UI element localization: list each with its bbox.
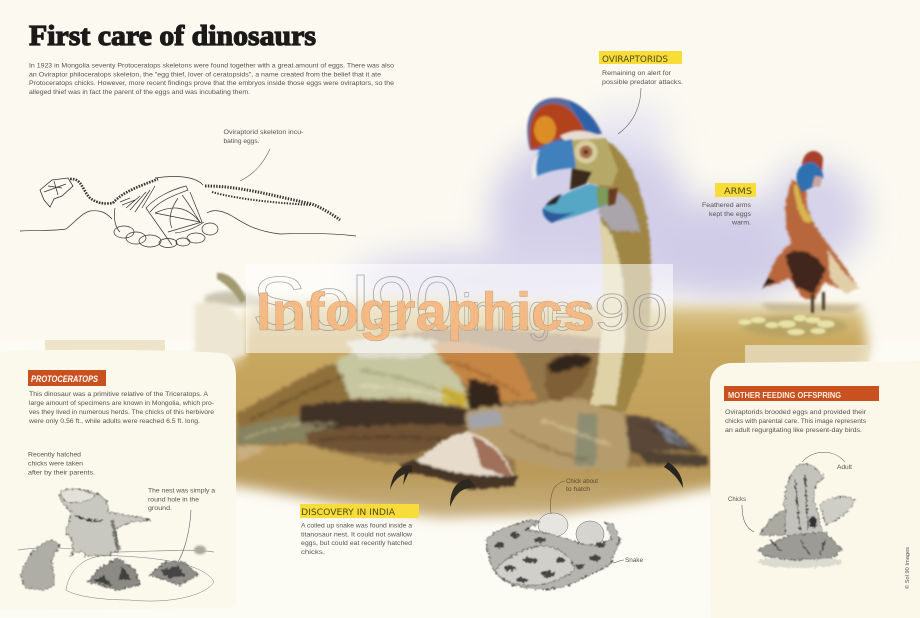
skeleton label with leader: [224, 129, 304, 181]
intro text: an Oviraptor philoceratops skeleton, the "egg thief, lover of ceratopsids", a name created from the belief that it ate: [29, 71, 381, 78]
callout: discovery in india: titanosaur nest. It could not swallow: [301, 532, 412, 538]
label: nest: ground.: [148, 505, 172, 512]
callout: arms: Feathered arms: [702, 202, 752, 209]
sandy ground: [190, 292, 868, 518]
watermark: Sol90: [252, 262, 460, 347]
intro text: In 1923 in Mongolia seventy Protoceratops skeletons were found together with a great amount of eggs. There was also: [29, 62, 394, 70]
label: chick about to hatch: [551, 478, 598, 514]
main oviraptorid illustration: [195, 98, 708, 507]
distant adult oviraptorid: [762, 151, 860, 313]
callout: discovery in india: DISCOVERY IN INDIA: [301, 508, 396, 518]
panel: mother feeding offspring: [710, 361, 920, 618]
watermark: Infographics: [256, 282, 594, 342]
label: snake: [613, 557, 643, 564]
protoceratops heading: PROTOCERATOPS: [31, 374, 98, 384]
callout: discovery in india: eggs, but could eat recently hatched: [301, 540, 412, 547]
mother feeding heading: MOTHER FEEDING OFFSPRING: [728, 390, 841, 400]
protoceratops description: [28, 391, 214, 425]
protoceratops description: ves they lived in numerous herds. The chicks of this herbivore: [29, 409, 214, 416]
tail end behind the panel: [195, 302, 246, 356]
callout: oviraptorids: OVIRAPTORIDS: [602, 55, 668, 65]
front foot with claws: [390, 432, 683, 507]
callout: discovery in india: A coiled up snake was found inside a: [301, 522, 412, 530]
label: recently hatched chicks: chicks were taken: [28, 460, 83, 468]
mother feeding heading: [724, 386, 879, 401]
sketch: adult feeding chicks: [757, 464, 855, 568]
mother feeding description: chicks with parental care. This image represents: [725, 418, 867, 425]
head: [527, 98, 618, 223]
callout: arms: kept the eggs: [709, 211, 752, 218]
fur shading: [245, 360, 695, 460]
label: adult: [802, 452, 852, 471]
title: First care of dinosaurs: [29, 20, 316, 52]
callout: discovery in india: chicks.: [301, 549, 325, 556]
callout: discovery in india: [300, 504, 419, 556]
egg nest: [738, 314, 847, 337]
skeleton label with leader: Oviraptorid skeleton incu-: [224, 129, 304, 136]
protoceratops description: were only 0.56 ft., while adults were reached 6.5 ft. long.: [28, 418, 200, 425]
callout: oviraptorids: [599, 51, 683, 134]
watermark: [246, 262, 673, 353]
copyright credit: © Sol 90 Images: [904, 546, 911, 589]
callout: arms: [702, 183, 756, 226]
label: recently hatched chicks: [28, 452, 95, 476]
label: chicks: [728, 496, 754, 532]
body: [237, 328, 708, 478]
label: chick about to hatch: Chick about: [566, 478, 598, 485]
label: nest: [148, 488, 215, 512]
intro text: alleged thief was in fact the parent of the eggs and was incubating them.: [29, 89, 250, 96]
intro text: [29, 62, 394, 96]
label: nest: round hole in the: [148, 496, 199, 504]
mother feeding description: Oviraptorids brooded eggs and provided their: [725, 409, 867, 416]
panel: protoceratops: [0, 350, 236, 610]
label: adult: Adult: [837, 464, 852, 471]
callout: oviraptorids: Remaining on alert for: [602, 70, 672, 77]
neck: [588, 140, 651, 412]
mother feeding description: an adult regurgitating like present-day birds.: [725, 427, 862, 434]
callout: arms: ARMS: [724, 187, 752, 197]
watermark: 90: [594, 284, 668, 342]
label: chicks: Chicks: [728, 496, 747, 503]
watermark: images: [462, 284, 594, 342]
protoceratops heading: [28, 370, 106, 386]
sketch: protoceratops with chicks: [18, 489, 214, 601]
callout: arms: warm.: [731, 220, 751, 226]
label: recently hatched chicks: after by their parents.: [28, 470, 95, 476]
intro text: Protoceratops chicks. However, more recent findings prove that the embryos inside those eggs were oviraptors, so the: [29, 80, 394, 87]
callout: oviraptorids: possible predator attacks.: [602, 79, 683, 86]
label: chick about to hatch: to hatch: [566, 486, 590, 493]
sketch: snake with eggs: [486, 513, 620, 589]
label: recently hatched chicks: Recently hatched: [28, 452, 81, 458]
label: nest: The nest was simply a: [148, 488, 215, 494]
lavender sky: [350, 106, 865, 312]
tape strips: [45, 340, 868, 376]
mother feeding description: [725, 409, 867, 434]
skeleton drawing: [20, 176, 356, 248]
protoceratops description: large amount of specimens are known in Mongolia, which pro-: [29, 400, 214, 407]
protoceratops description: This dinosaur was a primitive relative of the Triceratops. A: [29, 391, 209, 398]
skeleton label with leader: bating eggs.: [224, 138, 260, 145]
label: snake: Snake: [625, 557, 643, 564]
